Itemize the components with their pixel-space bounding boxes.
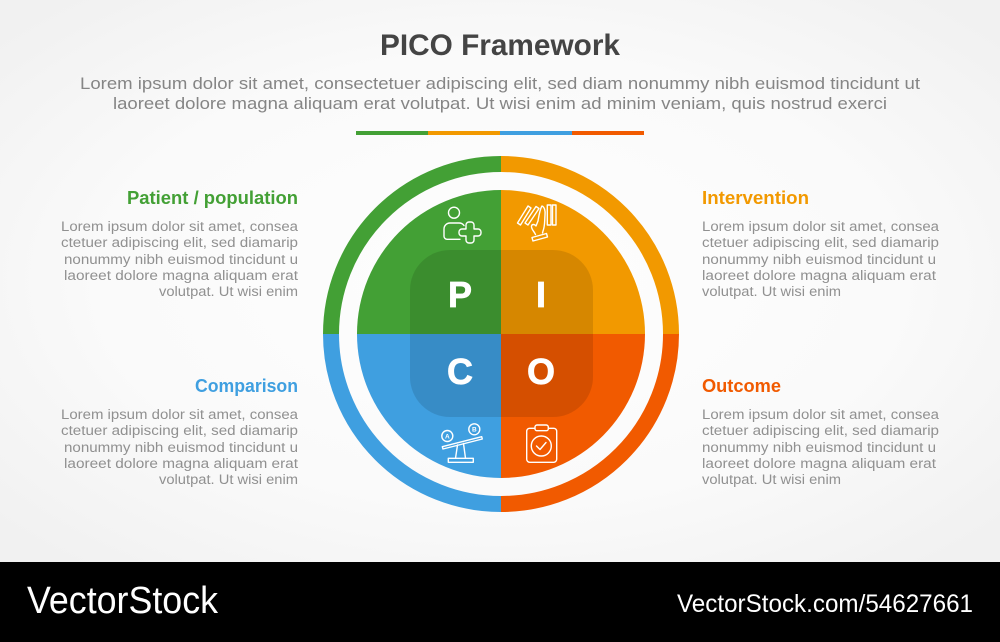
subtitle	[80, 74, 920, 113]
panel: intervention text: ctetuer adipiscing elit, sed diamarip	[702, 235, 939, 250]
panel: outcome text: laoreet dolore magna aliquam erat	[702, 456, 936, 471]
inner quadrant disc	[357, 190, 645, 478]
PICO circular diagram	[331, 164, 671, 504]
panel: comparison text	[61, 375, 299, 487]
panel: outcome text: volutpat. Ut wisi enim	[702, 472, 841, 487]
icon: comparison seesaw	[442, 424, 482, 462]
panel: patient / population text: laoreet dolore magna aliquam erat	[64, 268, 298, 283]
panel: patient / population text: Patient / population	[127, 187, 298, 208]
icon: intervention hand with bars	[518, 205, 556, 241]
panel: intervention text: Lorem ipsum dolor sit amet, consea	[702, 219, 940, 234]
panel: comparison text: Comparison	[195, 375, 298, 396]
panel: comparison text: laoreet dolore magna aliquam erat	[64, 456, 298, 471]
icon: outcome clipboard with check	[527, 425, 557, 462]
letter P: P	[448, 274, 472, 315]
label B on seesaw: B	[472, 427, 477, 434]
letter O: O	[527, 351, 555, 392]
letter C: C	[447, 351, 473, 392]
panel: patient / population text	[61, 187, 299, 299]
panel: comparison text: nonummy nibh euismod tincidunt u	[64, 440, 298, 455]
panel: intervention text: Intervention	[702, 187, 809, 208]
panel: intervention text: nonummy nibh euismod tincidunt u	[702, 252, 936, 267]
panel: outcome text: ctetuer adipiscing elit, sed diamarip	[702, 423, 939, 438]
outer ring	[331, 164, 671, 504]
panel: comparison text: Lorem ipsum dolor sit amet, consea	[61, 407, 299, 422]
panel: patient / population text: ctetuer adipiscing elit, sed diamarip	[61, 235, 298, 250]
footer brand: VectorStock	[27, 580, 219, 622]
label A on seesaw: A	[445, 433, 450, 440]
panel: comparison text: ctetuer adipiscing elit, sed diamarip	[61, 423, 298, 438]
panel: intervention text	[702, 187, 940, 299]
title: PICO Framework	[380, 29, 620, 62]
panel: intervention text: laoreet dolore magna aliquam erat	[702, 268, 936, 283]
title underline colour bar	[356, 131, 644, 135]
subtitle: Lorem ipsum dolor sit amet, consectetuer adipiscing elit, sed diam nonummy nibh euismod tincidunt ut	[80, 74, 920, 93]
panel: patient / population text: nonummy nibh euismod tincidunt u	[64, 252, 298, 267]
panel: patient / population text: volutpat. Ut wisi enim	[159, 284, 298, 299]
panel: intervention text: volutpat. Ut wisi enim	[702, 284, 841, 299]
panel: patient / population text: Lorem ipsum dolor sit amet, consea	[61, 219, 299, 234]
letter I: I	[536, 274, 546, 315]
centre rounded square	[410, 250, 593, 417]
footer url: VectorStock.com/54627661	[677, 590, 973, 618]
footer bar	[0, 562, 1000, 642]
icon: patient with medical cross	[444, 207, 481, 243]
subtitle: laoreet dolore magna aliquam erat volutpat. Ut wisi enim ad minim veniam, quis nostrud exerci	[113, 94, 887, 113]
panel: outcome text	[702, 375, 940, 487]
panel: outcome text: Outcome	[702, 375, 781, 396]
panel: outcome text: nonummy nibh euismod tincidunt u	[702, 440, 936, 455]
panel: comparison text: volutpat. Ut wisi enim	[159, 472, 298, 487]
panel: outcome text: Lorem ipsum dolor sit amet, consea	[702, 407, 940, 422]
